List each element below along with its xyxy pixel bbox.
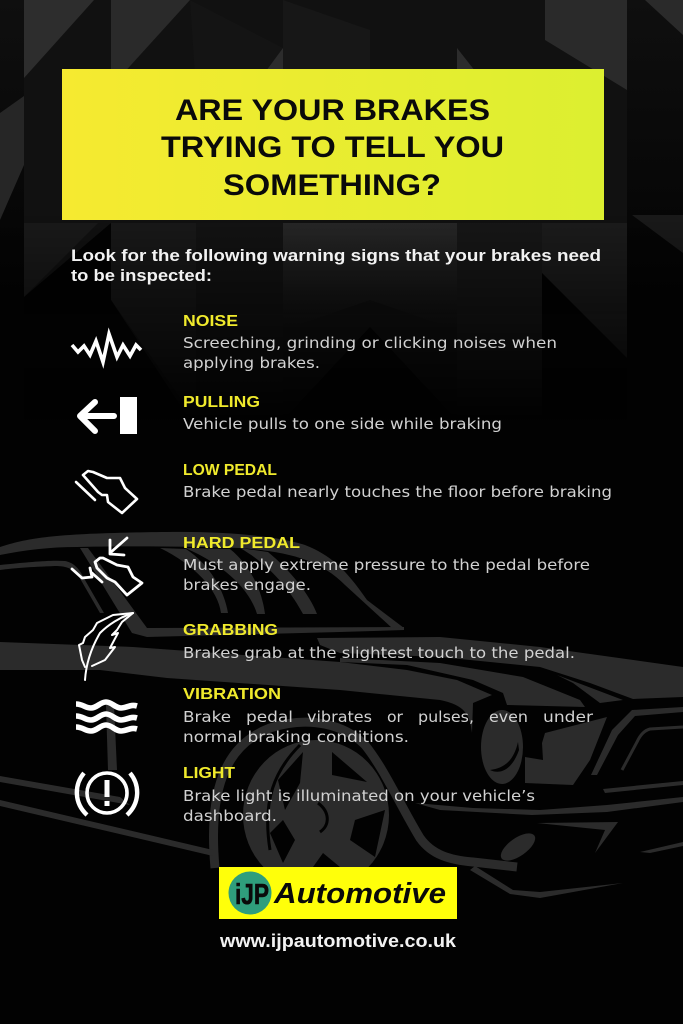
title text: TRYING TO TELL YOU: [161, 131, 504, 164]
item: light: Brake light is illuminated on your vehicle’s: [183, 787, 535, 805]
logo: iJP Automotive: [219, 867, 457, 919]
item: low pedal: LOW PEDAL: [183, 462, 277, 479]
item: noise: Screeching, grinding or clicking noises when: [183, 334, 557, 352]
item: vibration: pedal: [246, 708, 293, 726]
car roof: [0, 532, 404, 628]
logo: iJP Automotive: iJP: [235, 879, 269, 911]
car sill lines: [0, 776, 130, 805]
title text: ARE YOUR BRAKES: [175, 94, 490, 127]
background: car silhouette: [0, 532, 683, 898]
item: pulling: [183, 394, 502, 433]
icon: low pedal: [76, 471, 137, 513]
item: vibration: vibrates: [307, 708, 372, 726]
item: light: dashboard.: [183, 807, 277, 825]
item: grabbing: Brakes grab at the slightest touch to the pedal.: [183, 644, 575, 662]
icon: pulling arrow: [80, 397, 137, 434]
car grille lines: [591, 707, 683, 775]
item: pulling: Vehicle pulls to one side while braking: [183, 415, 502, 433]
car front panel: [525, 717, 607, 785]
intro text: [71, 246, 601, 285]
item: noise: applying brakes.: [183, 354, 320, 372]
item: vibration: even: [489, 708, 528, 726]
background: geometric chevron pattern: [0, 0, 683, 349]
item: grabbing: GRABBING: [183, 622, 278, 639]
item: pulling: PULLING: [183, 394, 260, 411]
intro text: to be inspected:: [71, 266, 212, 285]
icon: noise waveform: [72, 334, 141, 362]
item: vibration: normal braking conditions.: [183, 728, 409, 746]
item: hard pedal: HARD PEDAL: [183, 535, 300, 552]
car headlight: [481, 710, 523, 784]
item: light: LIGHT: [183, 765, 235, 782]
item: hard pedal: [183, 535, 590, 594]
title text: SOMETHING?: [223, 169, 441, 202]
item: vibration: [183, 686, 594, 746]
item: noise: [183, 313, 557, 372]
item: hard pedal: Must apply extreme pressure to the pedal before: [183, 556, 590, 574]
item: grabbing: [183, 622, 575, 662]
website url: www.ijpautomotive.co.uk: [219, 931, 457, 951]
item: vibration: Brake: [183, 708, 231, 726]
car hood band: [317, 637, 683, 699]
item: low pedal: [183, 462, 612, 501]
item: vibration: pulses,: [418, 708, 474, 726]
item: vibration: under: [543, 708, 594, 726]
car fog light: [496, 828, 540, 866]
intro text: Look for the following warning signs that your brakes need: [71, 246, 601, 265]
car roof stripes: [160, 548, 228, 613]
item: vibration: VIBRATION: [183, 686, 281, 703]
item: low pedal: Brake pedal nearly touches the floor before braking: [183, 483, 612, 501]
item: vibration: or: [387, 708, 404, 726]
icon: feather: [79, 613, 133, 680]
logo: iJP Automotive: Automotive: [273, 878, 446, 910]
icon: hard pedal: [72, 538, 142, 595]
title text: [161, 94, 504, 202]
car side window frame: [0, 561, 104, 613]
car air intake: [537, 822, 618, 853]
icon: vibration waves: [76, 702, 137, 731]
car wheel: [243, 740, 389, 890]
item: noise: NOISE: [183, 313, 238, 330]
car belt band: [0, 642, 492, 733]
item: light: [183, 765, 535, 825]
item: hard pedal: brakes engage.: [183, 576, 311, 594]
car bumper: [603, 781, 683, 793]
car wheel arch: [213, 722, 517, 868]
title banner: [62, 69, 604, 220]
icon: brake warning light: [77, 773, 137, 815]
